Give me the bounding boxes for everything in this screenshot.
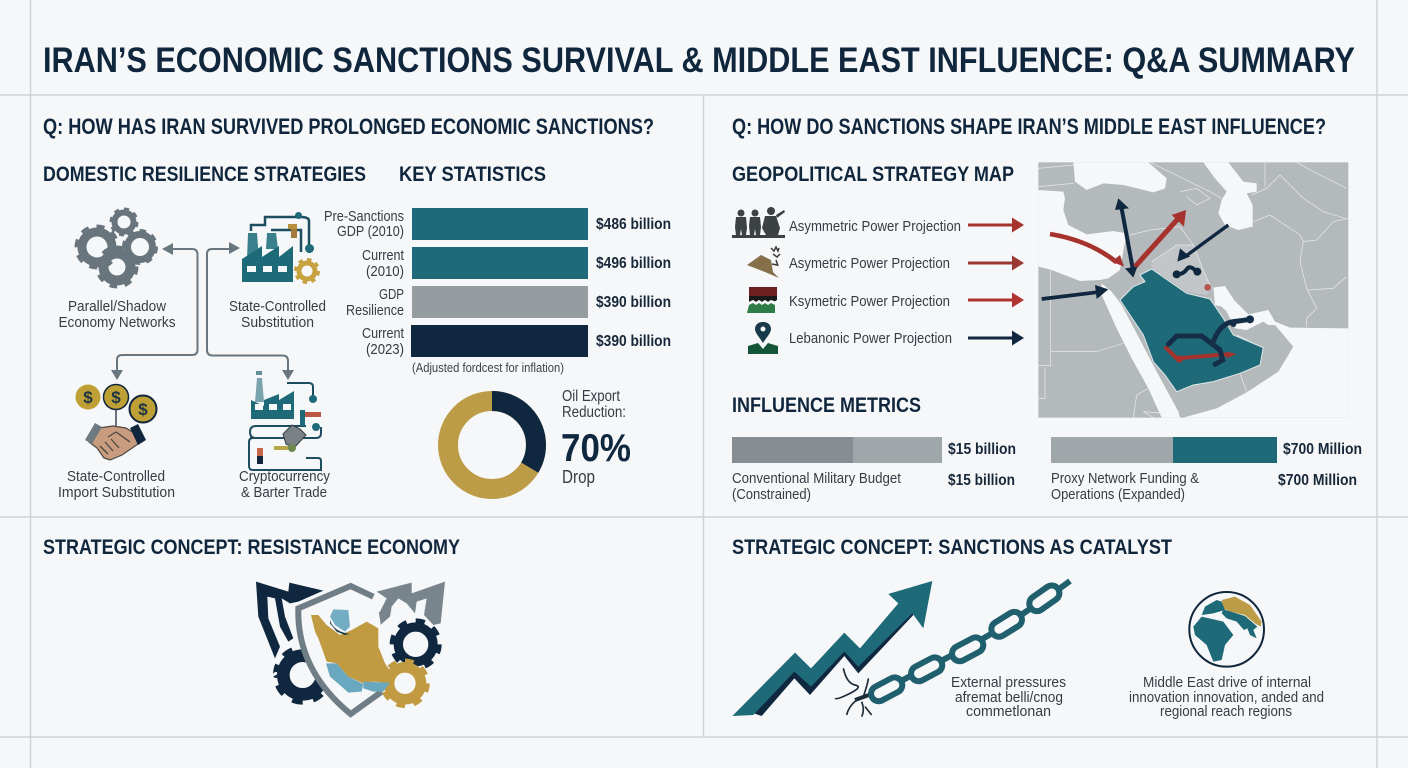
arrow: legend three [968,292,1024,308]
text: cryptocurrency barter [239,468,330,501]
text: legend one: Asymmetric Power Projection [789,218,961,235]
bar values: $486 billion [596,216,671,233]
bar chart: GDP statistics [324,208,671,375]
text: state controlled substitution: Substitution [241,314,314,331]
heading: sanctions as catalyst: STRATEGIC CONCEPT: SANCTIONS AS CATALYST [732,536,1172,559]
chart: conventional military budget: (Constrained) [732,486,811,503]
chart: conventional military budget: Conventional Military Budget [732,470,902,487]
text: state controlled substitution [229,298,326,331]
bar values: $390 billion [596,294,671,311]
panel: middle east influence question [732,114,1362,503]
icon: factory with gear [242,212,318,282]
map influence arrows [1042,205,1250,364]
chart: proxy network funding: Operations (Expanded) [1051,486,1185,503]
arrow: legend two [968,256,1024,270]
icon: coins and handshake: $ [138,400,148,419]
text: middle east drive: innovation innovation, anded and [1129,689,1324,706]
callout: 70 percent drop: 70% [561,427,631,470]
icon: globe [1189,592,1264,667]
text: external pressures: commetlonan [966,703,1051,720]
icon: shadow economy gears [78,210,156,286]
bar axis labels: GDP (2010) [337,223,404,240]
map land base [1038,162,1348,418]
callout: 70 percent drop [561,388,631,487]
icon: crypto and barter factory [249,371,321,470]
text: parallel shadow economy: Economy Networks [58,314,176,331]
bar values: $496 billion [596,255,671,272]
icon: militia silhouettes [732,207,785,238]
bar: current 2023 [411,325,588,357]
chart: proxy network funding [1051,437,1362,503]
heading: influence metrics: INFLUENCE METRICS [732,394,921,417]
icon: shield map and gears [256,582,445,714]
text: legend two: Asymetric Power Projection [789,255,950,272]
text: middle east drive: Middle East drive of internal [1143,674,1311,691]
text: cryptocurrency barter: Cryptocurrency [239,468,330,485]
text: external pressures [951,674,1066,720]
bar axis labels: GDP [379,286,404,303]
donut chart: oil export reduction [448,401,536,489]
text: legend three: Ksymetric Power Projection [789,293,950,310]
panel: economic survival question [43,114,671,501]
heading: domestic resilience strategies: DOMESTIC RESILIENCE STRATEGIES [43,163,366,186]
text: import substitution: Import Substitution [58,484,175,501]
text: external pressures: afremat belli/cnog [955,689,1063,706]
bar axis labels: Pre-Sanctions [324,208,404,225]
icon: flag [747,287,777,313]
chart: proxy network funding: $700 Million [1283,441,1362,458]
bar: GDP resilience [412,286,588,318]
bar: current 2010 [412,247,588,279]
chart: conventional military budget: $15 billion [948,441,1016,458]
panel: resistance economy concept [43,536,460,714]
arrows: strategy flow connectors [111,242,294,380]
chart: proxy network funding: Proxy Network Funding & [1051,470,1199,487]
text: state controlled substitution: State-Controlled [229,298,326,315]
icon: breaking chain [835,581,1070,717]
arrow: legend four [968,330,1024,346]
text: import substitution: State-Controlled [67,468,165,485]
text: middle east drive: regional reach regions [1160,703,1292,720]
icon: location figure [748,322,778,354]
heading: key statistics: KEY STATISTICS [399,163,546,186]
bar values: $390 billion [596,333,671,350]
callout: 70 percent drop: Drop [562,467,595,487]
text: middle east drive [1129,674,1324,720]
map lighter territories [1152,245,1212,295]
bar values [596,216,671,350]
chart: conventional military budget [732,437,1016,503]
icon: coins and handshake [76,384,156,460]
question heading left: Q: HOW HAS IRAN SURVIVED PROLONGED ECONOMIC SANCTIONS? [43,114,654,139]
icon: coins and handshake: $ [111,388,121,407]
icon: regional territory [747,247,780,278]
bar axis labels [324,208,405,358]
text: import substitution [58,468,175,501]
arrow: legend one [968,218,1024,232]
text: cryptocurrency barter: & Barter Trade [241,484,327,501]
heading: geopolitical strategy map: GEOPOLITICAL STRATEGY MAP [732,163,1014,186]
callout: 70 percent drop: Reduction: [562,404,626,421]
text: legend four: Lebanonic Power Projection [789,330,952,347]
text: parallel shadow economy: Parallel/Shadow [68,298,166,315]
bar axis labels: Current [362,325,405,342]
panel: sanctions as catalyst concept [732,536,1324,720]
chart: conventional military budget: $15 billion [948,472,1015,489]
map: middle east strategy map [1038,162,1348,418]
text: parallel shadow economy [58,298,176,331]
map border lines [1038,162,1348,418]
bar: pre-sanctions GDP [412,208,588,240]
callout: 70 percent drop: Oil Export [562,388,620,405]
bar axis labels: Current [362,247,405,264]
text: external pressures: External pressures [951,674,1066,691]
chart note: (Adjusted fordcest for inflation) [412,360,564,375]
chart: proxy network funding: $700 Million [1278,472,1357,489]
bar axis labels: Resilience [346,302,404,319]
map water bodies [1038,162,1348,418]
map highlighted country [1120,269,1263,392]
icon: rising arrow [732,581,932,716]
heading: resistance economy: STRATEGIC CONCEPT: RESISTANCE ECONOMY [43,536,460,559]
bar axis labels: (2010) [366,263,404,280]
icon: coins and handshake: $ [83,388,93,407]
bar axis labels: (2023) [366,341,404,358]
